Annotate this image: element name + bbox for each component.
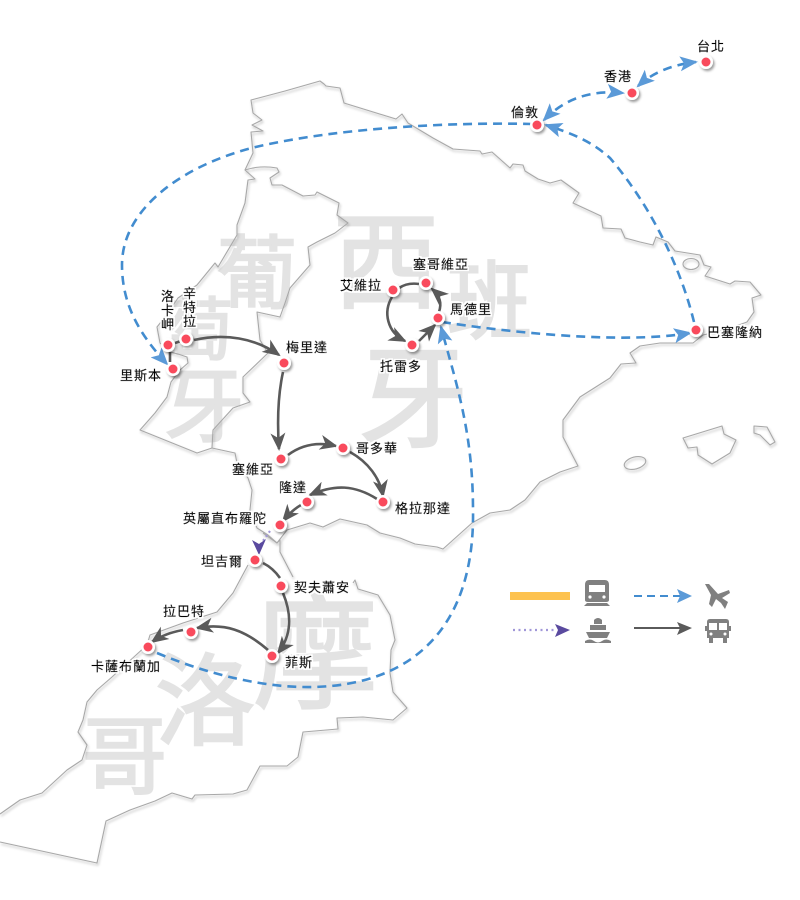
city labels: 艾維拉 bbox=[340, 278, 382, 293]
city labels bbox=[91, 39, 763, 674]
ferry route bbox=[252, 531, 270, 555]
city markers bbox=[141, 55, 713, 663]
watermark country names: 萄 bbox=[165, 293, 233, 369]
city labels: 洛 bbox=[161, 289, 175, 304]
legend: flight line bbox=[634, 595, 680, 597]
Morocco outline bbox=[0, 533, 407, 863]
watermark country names: 哥 bbox=[82, 711, 167, 806]
city labels: 巴塞隆納 bbox=[707, 325, 763, 340]
city labels: 格拉那達 bbox=[395, 501, 451, 516]
city labels: 特 bbox=[183, 300, 197, 315]
watermark country names: 葡 bbox=[217, 230, 297, 319]
city labels: 卡 bbox=[161, 303, 175, 318]
city labels: 里斯本 bbox=[120, 368, 162, 383]
legend: ferry arrow bbox=[555, 624, 570, 637]
city labels: 契夫蕭安 bbox=[294, 580, 350, 595]
city labels: 卡薩布蘭加 bbox=[91, 659, 161, 674]
city labels: 拉 bbox=[183, 314, 197, 329]
watermark country names bbox=[82, 205, 532, 806]
city labels: 坦吉爾 bbox=[201, 554, 243, 569]
city labels: 英屬直布羅陀 bbox=[183, 511, 267, 526]
city labels: 塞維亞 bbox=[232, 462, 274, 477]
watermark country names: 牙 bbox=[164, 363, 244, 452]
city labels: 梅里達 bbox=[286, 340, 328, 355]
icon: plane bbox=[705, 584, 730, 609]
legend: ferry line bbox=[513, 629, 556, 631]
city labels: 菲斯 bbox=[285, 655, 313, 670]
Iberian peninsula outline bbox=[140, 81, 761, 549]
watermark country names: 洛 bbox=[155, 647, 255, 759]
watermark country names: 班 bbox=[447, 256, 532, 351]
city labels: 岬 bbox=[161, 317, 175, 332]
legend: bus arrow bbox=[677, 622, 692, 635]
icon: ship bbox=[585, 618, 611, 643]
city labels: 辛 bbox=[183, 286, 197, 301]
watermark country names: 西 bbox=[333, 205, 439, 323]
city labels: 隆達 bbox=[279, 480, 307, 495]
flight routes bbox=[122, 62, 696, 687]
city labels: 哥多華 bbox=[356, 441, 398, 456]
icon: train bbox=[584, 580, 610, 606]
city labels: 馬德里 bbox=[450, 302, 492, 317]
Balearic islands bbox=[683, 426, 775, 464]
Spain and Portugal border bbox=[212, 167, 348, 448]
legend: bus line bbox=[634, 627, 680, 629]
icon: bus bbox=[705, 619, 731, 643]
watermark country names: 摩 bbox=[253, 586, 378, 725]
city labels: 香港 bbox=[604, 69, 632, 84]
city labels: 托雷多 bbox=[380, 359, 422, 374]
city labels: 塞哥維亞 bbox=[413, 257, 469, 272]
bus routes bbox=[152, 284, 440, 653]
watermark country names: 牙 bbox=[358, 339, 468, 462]
legend: rail line bbox=[510, 592, 570, 600]
city labels: 倫敦 bbox=[511, 105, 539, 120]
city labels: 台北 bbox=[697, 39, 725, 54]
legend: flight arrow bbox=[677, 589, 692, 603]
city labels: 拉巴特 bbox=[163, 604, 205, 619]
legend bbox=[510, 580, 731, 643]
